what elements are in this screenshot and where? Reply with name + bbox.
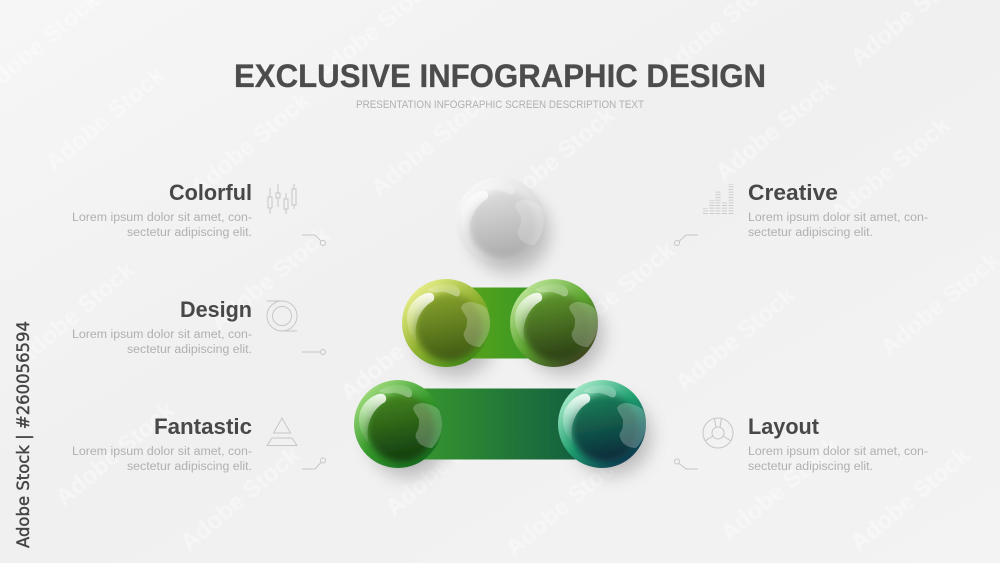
watermark pattern: Adobe Stock [205,221,336,337]
connector: design [302,350,326,354]
sphere: lime [402,279,490,367]
description: layout: Lorem ipsum dolor sit amet, con- [748,446,928,458]
description: colorful [72,212,252,239]
description: creative: Lorem ipsum dolor sit amet, con- [748,212,928,224]
connector: colorful [302,235,326,246]
description: creative: sectetur adipiscing elit. [748,227,873,239]
description: layout [748,446,928,473]
description: colorful: Lorem ipsum dolor sit amet, con- [72,212,252,224]
sphere: teal [558,380,646,468]
description: fantastic [72,446,252,473]
icon: segmented ring [703,418,733,448]
watermark pattern: Adobe Stock [365,86,496,202]
stock id label: Adobe Stock | #260056594 [14,321,34,548]
description: design: sectetur adipiscing elit. [127,344,252,356]
watermark pattern: Adobe Stock [10,256,141,372]
panel: creative [674,180,928,246]
icon: concentric circles [267,301,297,331]
watermark pattern: Adobe Stock [335,291,466,407]
connector: fantastic [302,458,326,469]
heading: colorful: Colorful [169,180,252,205]
watermark pattern: Adobe Stock [710,71,841,187]
watermark pattern: Adobe Stock [715,431,846,547]
panel: design [72,297,326,356]
watermark pattern: Adobe Stock [50,396,181,512]
icon: candlestick chart [268,184,296,214]
watermark pattern: Adobe Stock [845,441,976,557]
sphere: olive green [510,279,598,367]
watermark pattern: Adobe Stock [670,281,801,397]
watermark pattern: Adobe Stock [40,61,171,177]
description: design [72,329,252,356]
subtitle: PRESENTATION INFOGRAPHIC SCREEN DESCRIPTION TEXT [356,99,644,111]
connector: creative [674,235,698,246]
panel: colorful [72,180,326,246]
heading: design: Design [180,297,252,322]
description: design: Lorem ipsum dolor sit amet, con- [72,329,252,341]
sphere shadows [368,193,652,478]
description: layout: sectetur adipiscing elit. [748,461,873,473]
sphere chart [354,177,652,478]
icon: equalizer bars [706,184,731,214]
sphere: white [456,177,544,265]
panel: fantastic [72,414,326,473]
title: EXCLUSIVE INFOGRAPHIC DESIGN [234,58,766,94]
watermark pattern: Adobe Stock [825,111,956,227]
watermark pattern: Adobe Stock [380,406,511,522]
heading: fantastic: Fantastic [154,414,252,439]
heading: layout: Layout [748,414,820,439]
icon: pyramid [267,418,297,446]
panel: layout [674,414,928,473]
heading: creative: Creative [748,180,838,205]
watermark pattern: Adobe Stock [490,101,621,217]
description: colorful: sectetur adipiscing elit. [127,227,252,239]
description: fantastic: sectetur adipiscing elit. [127,461,252,473]
bar: lower connector [420,388,580,460]
connector: layout [674,459,698,469]
sphere: green [354,380,442,468]
watermark pattern: Adobe Stock [185,86,316,202]
watermark pattern: Adobe Stock [175,441,306,557]
description: fantastic: Lorem ipsum dolor sit amet, con- [72,446,252,458]
description: creative [748,212,928,239]
watermark pattern: Adobe Stock [550,236,681,352]
watermark pattern: Adobe Stock [500,446,631,562]
bar: upper connector [470,288,530,358]
